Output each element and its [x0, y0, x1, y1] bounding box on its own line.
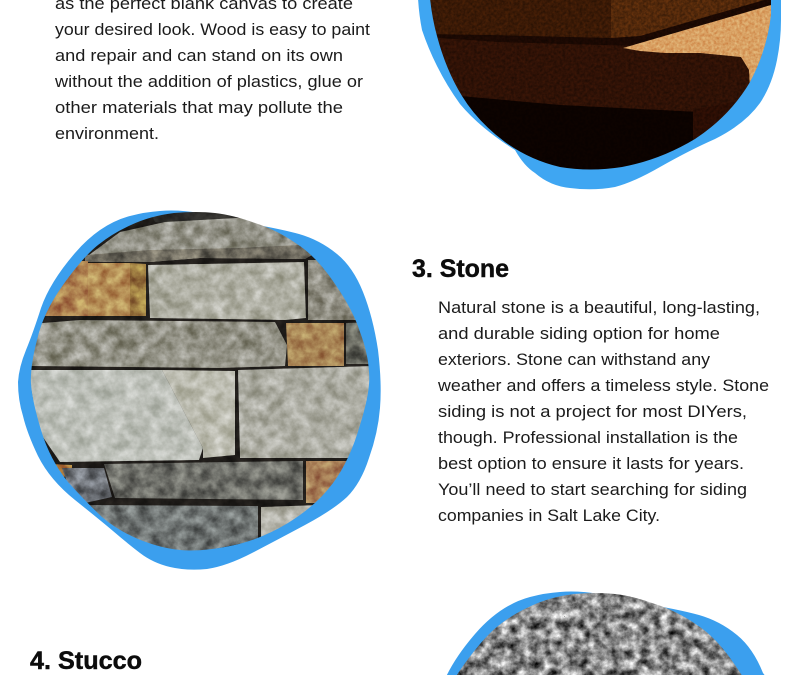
text block: stone description: companies in Salt Lake City. [438, 506, 660, 525]
text block: wood description: other materials that may pollute the [55, 98, 343, 117]
text block: stone description: siding is not a project for most DIYers, [438, 402, 747, 421]
heading: stucco: 4. Stucco [30, 647, 142, 675]
text block: stone description: best option to ensure it lasts for years. [438, 454, 744, 473]
blue blob behind stone photo [18, 210, 381, 570]
stone wall photo [30, 212, 370, 550]
blue blob behind stucco photo [441, 591, 778, 675]
text block: stone description: You’ll need to start searching for siding [438, 480, 747, 499]
stone texture [31, 212, 370, 550]
panel: stucco photo blob [446, 592, 764, 675]
panel: stone photo blob [15, 205, 385, 570]
third stone row [30, 320, 287, 368]
text block: wood description [54, 0, 370, 143]
text block: wood description: and repair and can stand on its own [55, 46, 343, 65]
panel: wood photo blob [418, 0, 781, 189]
text block: wood description: your desired look. Wood is easy to paint [55, 20, 370, 39]
second stone row [45, 261, 88, 316]
top stone row [152, 212, 236, 222]
fourth stone row [28, 370, 203, 462]
text block: stone description: Natural stone is a beautiful, long-lasting, [438, 298, 760, 317]
text block: stone description [437, 298, 769, 525]
blue blob behind wood photo [418, 0, 781, 189]
fifth stone row [56, 464, 72, 477]
wood photo [425, 0, 777, 178]
stucco texture photo [457, 593, 742, 675]
heading: stone: 3. Stone [412, 255, 509, 283]
text block: wood description: without the addition of plastics, glue or [54, 72, 363, 91]
text block: stone description: and durable siding option for home [438, 324, 720, 343]
bottom stone row [85, 505, 258, 552]
text block: wood description: environment. [55, 124, 159, 143]
text block: stone description: though. Professional installation is the [438, 428, 738, 447]
text block: stone description: weather and offers a timeless style. Stone [437, 376, 769, 395]
text block: stone description: exteriors. Stone can withstand any [438, 350, 711, 369]
